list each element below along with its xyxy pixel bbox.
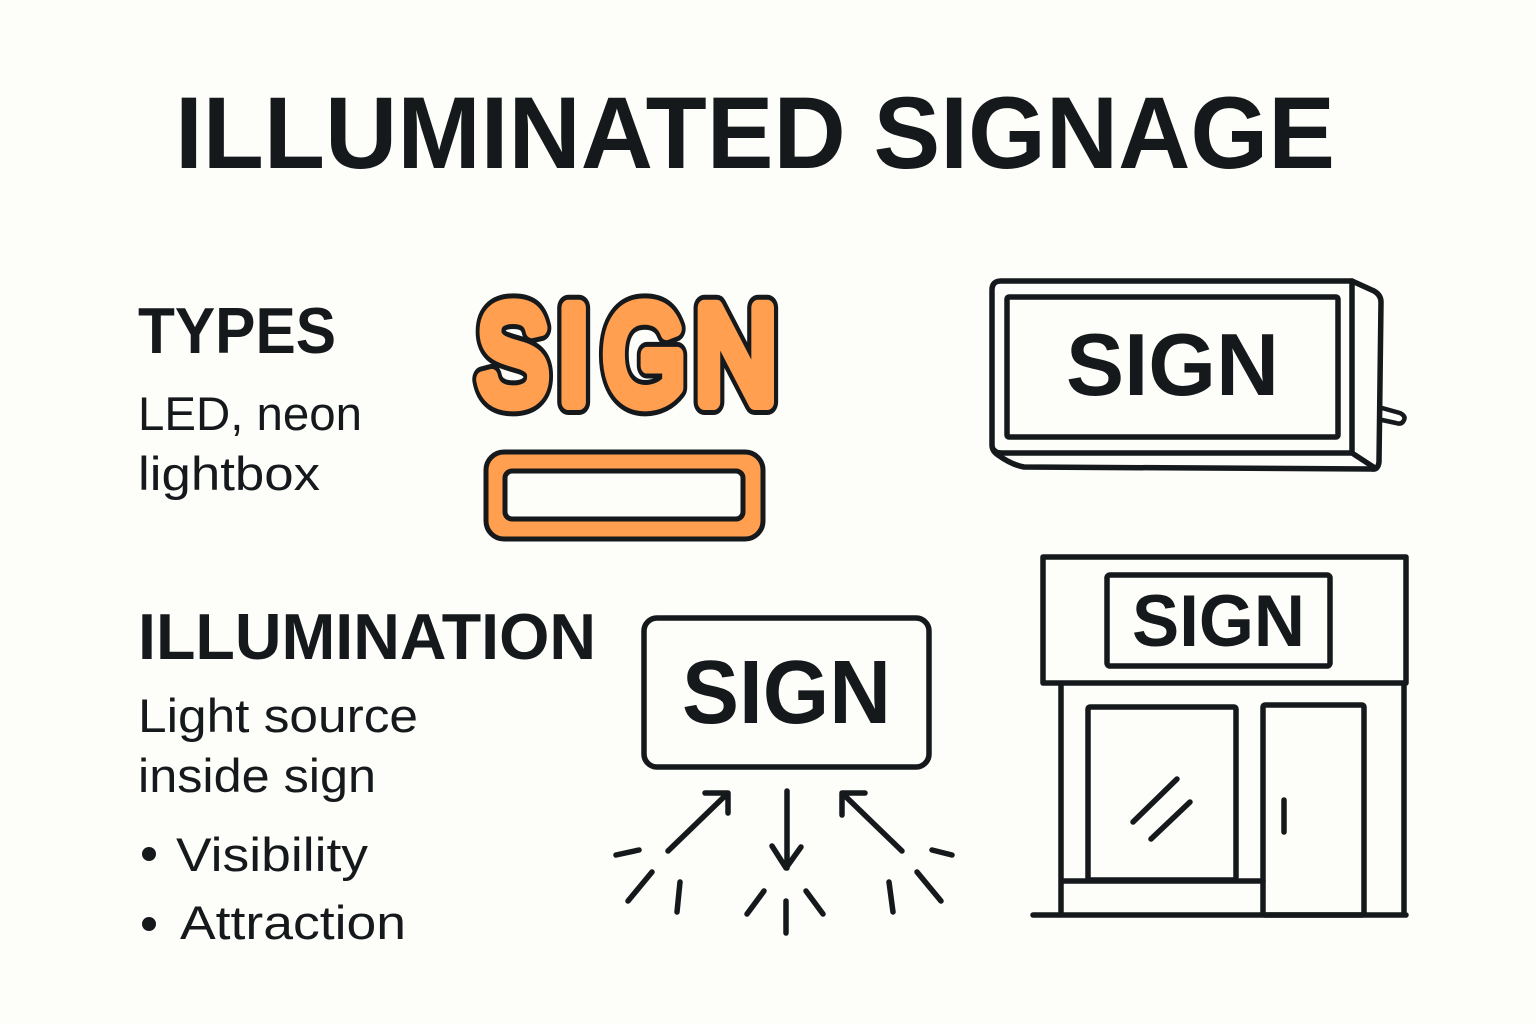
icon: storefront — [1033, 557, 1406, 915]
lightbox label: SIGN — [1066, 315, 1279, 414]
text block: types list: LED, neon — [138, 387, 362, 440]
storefront sign label: SIGN — [1132, 581, 1305, 662]
backlit sign label: SIGN — [682, 643, 891, 743]
title: ILLUMINATED SIGNAGE — [175, 76, 1335, 190]
text block: illumination description — [138, 689, 418, 802]
arrows: light rays pointing at sign — [668, 791, 902, 868]
storefront door — [1263, 705, 1364, 915]
icon: orange neon sign lettering: G — [604, 278, 685, 431]
icon: backlit sign box — [644, 618, 929, 767]
bullet list: benefits — [142, 828, 406, 949]
icon: orange neon sign lettering: N — [695, 278, 777, 431]
bullet list: benefits: Visibility — [176, 828, 369, 881]
icon: lightbox sign — [992, 281, 1404, 469]
storefront window — [1088, 707, 1236, 880]
icon: light ray ticks — [616, 850, 952, 933]
icon: orange neon sign lettering: S — [478, 278, 548, 431]
bullet list: benefits: Attraction — [180, 896, 406, 949]
icon: orange neon sign lettering: N — [695, 278, 777, 431]
heading: types: TYPES — [138, 294, 336, 367]
icon: orange neon sign lettering: S — [478, 278, 548, 431]
text block: illumination description: Light source — [138, 689, 418, 742]
icon: orange neon bar frame — [486, 452, 763, 539]
panel: types text — [138, 294, 362, 500]
icon: orange neon sign lettering: I — [558, 278, 590, 431]
icon: orange neon sign lettering: I — [558, 278, 590, 431]
heading: illumination: ILLUMINATION — [138, 600, 596, 673]
icon: orange neon sign lettering — [478, 278, 777, 431]
panel: illumination text — [138, 600, 596, 949]
icon: orange neon sign lettering: G — [604, 278, 685, 431]
text block: types list — [138, 387, 362, 500]
text block: types list: lightbox — [138, 447, 320, 500]
text block: illumination description: inside sign — [138, 749, 376, 802]
